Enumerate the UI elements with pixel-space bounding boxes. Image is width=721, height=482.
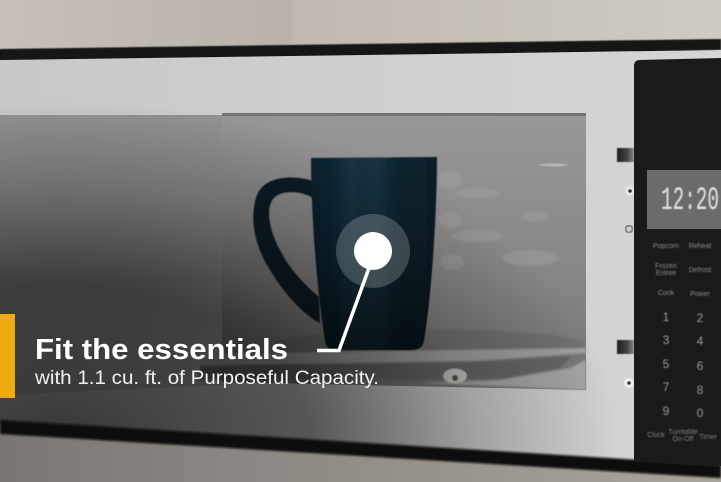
callout leader line	[317, 268, 369, 350]
panel body	[634, 58, 721, 466]
yellow accent bar	[0, 314, 15, 398]
countertop below microwave	[0, 420, 721, 482]
callout marker halo	[336, 214, 410, 288]
lower function buttons	[647, 429, 717, 443]
top black trim	[0, 39, 721, 60]
cavity back wall	[222, 113, 586, 390]
function buttons: Popcorn	[653, 243, 679, 250]
callout marker dot	[354, 232, 392, 270]
glint on back wall	[538, 164, 568, 166]
number keys: 0	[697, 406, 704, 420]
lower-left text shading	[0, 122, 594, 456]
number keys: 3	[663, 333, 670, 347]
lower function buttons: Clock	[647, 432, 665, 439]
lower function buttons: Timer	[699, 434, 717, 441]
function buttons: Cook	[658, 290, 675, 297]
background wall	[0, 0, 721, 50]
cooking cavity window	[0, 113, 586, 395]
function buttons: Entree	[656, 270, 676, 277]
turntable	[200, 329, 586, 390]
function buttons: Defrost	[689, 267, 711, 274]
upper notch	[626, 226, 632, 232]
mug body	[311, 157, 437, 350]
subheading: with 1.1 cu. ft. of Purposeful Capacity.	[34, 368, 379, 389]
number keys: 1	[663, 310, 670, 324]
upper screw	[625, 186, 635, 196]
heading: Fit the essentials	[35, 334, 288, 366]
number keys	[663, 310, 704, 420]
mug handle	[253, 178, 320, 323]
lower function buttons: On-Off	[673, 436, 693, 443]
turntable roller	[443, 368, 467, 384]
number keys: 2	[697, 311, 704, 325]
number keys: 5	[663, 357, 670, 371]
function buttons: Reheat	[689, 243, 711, 250]
lower hinge	[617, 340, 634, 354]
function buttons: Frozen	[655, 263, 677, 270]
number keys: 6	[697, 359, 704, 373]
control panel	[634, 58, 721, 466]
number keys: 7	[663, 380, 670, 394]
number keys: 4	[697, 334, 704, 348]
cavity top edge	[222, 113, 586, 116]
mug	[253, 157, 437, 350]
cavity left wall	[0, 115, 222, 395]
function buttons: Power	[690, 291, 711, 298]
upper hinge	[617, 148, 634, 162]
door hinges and latches	[617, 148, 635, 388]
display window	[647, 170, 721, 229]
function buttons	[653, 243, 711, 298]
number keys: 9	[663, 404, 670, 418]
bottom black trim	[0, 420, 721, 478]
reflections on back wall	[438, 171, 558, 270]
lower function buttons: Turntable	[668, 429, 698, 436]
number keys: 8	[697, 383, 704, 397]
lower screw	[624, 378, 634, 388]
